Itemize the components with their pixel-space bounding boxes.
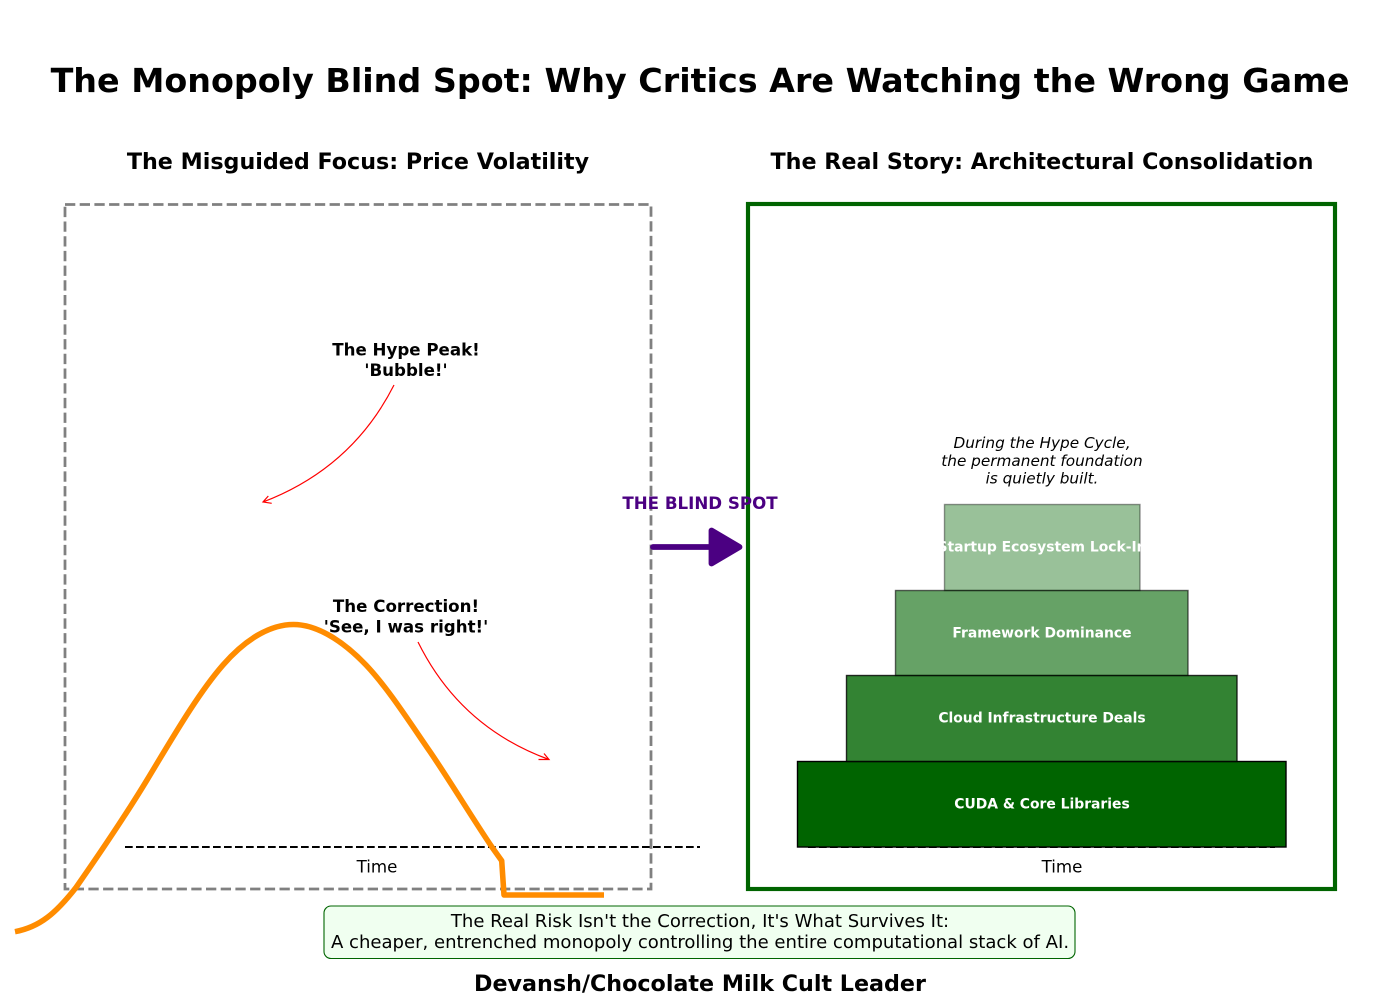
pyramid: layer 4 — [944, 504, 1140, 590]
attribution: Devansh/Chocolate Milk Cult Leader — [474, 971, 926, 997]
axis label: time: Time — [1041, 858, 1082, 876]
callout: conclusion: The Real Risk Isn't the Correction, It's What Survives It: — [450, 911, 949, 932]
note: hype cycle foundation: the permanent foundation — [941, 452, 1143, 470]
panel frame: solid border — [748, 204, 1335, 889]
note: hype cycle foundation: is quietly built. — [986, 470, 1098, 488]
note: hype cycle foundation: During the Hype Cycle, — [953, 434, 1131, 452]
arrow: hype peak pointer — [263, 385, 394, 503]
panel: price volatility — [15, 204, 700, 932]
arrow: correction pointer — [418, 642, 549, 760]
title: The Monopoly Blind Spot: Why Critics Are Watching the Wrong Game — [51, 61, 1349, 100]
callout: hype peak: The Hype Peak! — [332, 340, 480, 360]
arrow: blind spot — [653, 530, 740, 564]
callout: conclusion: A cheaper, entrenched monopoly controlling the entire computational stack of AI. — [331, 932, 1069, 953]
pyramid: layer 3 — [896, 590, 1188, 676]
callout: correction: 'See, I was right!' — [324, 618, 488, 636]
callout: correction: The Correction! — [333, 597, 479, 616]
label: layer 4: Startup Ecosystem Lock-In — [937, 540, 1147, 556]
heading: right panel: The Real Story: Architectural Consolidation — [771, 149, 1313, 175]
callout: conclusion — [324, 906, 1075, 958]
pyramid: layer 2 — [846, 676, 1237, 762]
heading: left panel: The Misguided Focus: Price Volatility — [127, 149, 590, 175]
panel frame: dashed border — [65, 204, 651, 889]
label: layer 1: CUDA & Core Libraries — [954, 796, 1130, 812]
panel: architectural consolidation — [748, 204, 1335, 889]
time axis — [125, 846, 700, 848]
callout: hype peak: 'Bubble!' — [364, 361, 448, 380]
hype cycle curve — [15, 624, 604, 932]
time axis — [808, 846, 1275, 848]
axis label: time: Time — [356, 858, 397, 876]
label: layer 2: Cloud Infrastructure Deals — [938, 710, 1146, 726]
label: layer 3: Framework Dominance — [952, 626, 1132, 642]
pyramid: layer 1 — [798, 762, 1286, 847]
label: blind spot: THE BLIND SPOT — [622, 494, 778, 513]
